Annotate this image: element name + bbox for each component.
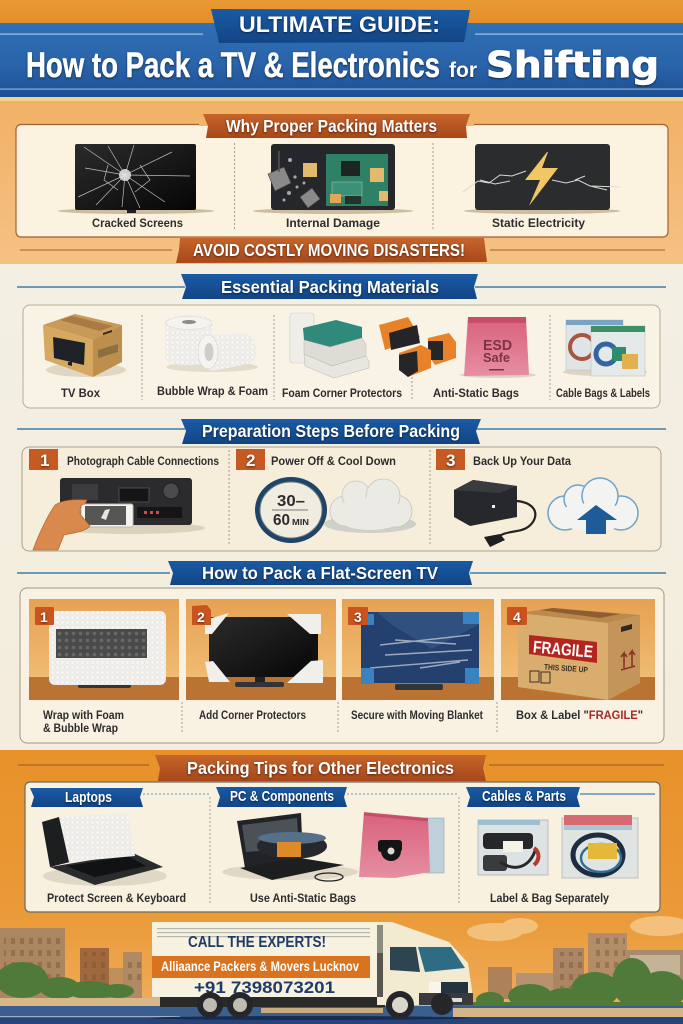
label: label and bag separately: Label & Bag Separately	[490, 891, 609, 905]
heading ribbon: packing tips: Packing Tips for Other Electronics	[187, 758, 454, 778]
label: static electricity: Static Electricity	[492, 216, 585, 230]
background: cream middle section	[0, 264, 683, 750]
truck wheels	[197, 991, 414, 1019]
icon: external hard drive	[454, 480, 535, 547]
section: how to pack a flat-screen TV	[17, 561, 666, 743]
panel: preparation steps	[22, 447, 661, 551]
icon: bubble wrap rolls	[165, 315, 258, 372]
heading ribbon: essential packing materials	[181, 274, 478, 299]
badge: step 1	[29, 449, 58, 470]
label: back up your data: Back Up Your Data	[473, 454, 571, 468]
icon: cable bags	[563, 320, 647, 376]
heading ribbon: preparation steps: Preparation Steps Before Packing	[202, 421, 460, 441]
badge: 4: 4	[513, 609, 521, 625]
section: preparation steps	[17, 419, 666, 551]
background: peach why-section	[0, 100, 683, 265]
step 4 tile: fragile box	[501, 599, 655, 700]
label: wrap with foam and bubble wrap	[43, 708, 124, 735]
background: top orange strip	[0, 0, 683, 30]
main title: for	[449, 59, 477, 82]
icon: pink ESD safe bag: ESD	[483, 337, 512, 354]
step 1 tile: wrap with foam	[29, 599, 179, 700]
panel: materials	[23, 305, 660, 408]
label: wrap with foam and bubble wrap: & Bubble Wrap	[43, 721, 118, 735]
heading ribbon: essential packing materials: Essential Packing Materials	[221, 277, 439, 297]
label: foam corner protectors: Foam Corner Protectors	[282, 386, 402, 400]
badge: step 2: 2	[246, 451, 255, 470]
sub-heading ribbon: PC and components: PC & Components	[230, 788, 334, 805]
step 2 tile: corner protectors	[186, 599, 336, 700]
label: power off and cool down: Power Off & Cool Down	[271, 454, 396, 468]
label: protect screen and keyboard: Protect Screen & Keyboard	[47, 891, 186, 905]
label: secure with moving blanket: Secure with Moving Blanket	[351, 708, 483, 722]
icon: foam sheets and roll	[290, 313, 369, 378]
icon: laptop and components	[222, 813, 358, 881]
truck cab	[377, 922, 473, 1015]
warning ribbon: avoid costly moving disasters: AVOID COSTLY MOVING DISASTERS!	[193, 240, 465, 260]
heading ribbon: flat-screen TV: How to Pack a Flat-Screen TV	[202, 563, 438, 583]
background: orange lower section	[0, 750, 683, 1024]
heading ribbon: flat-screen TV	[168, 561, 473, 585]
icon: 30-60 minute timer: 60	[273, 512, 290, 529]
badge: 1	[35, 607, 54, 625]
badge: step 2	[236, 449, 265, 470]
sub-heading ribbon: laptops	[30, 788, 143, 807]
callout: call the experts: CALL THE EXPERTS!	[188, 934, 326, 951]
subtitle tab: ULTIMATE GUIDE:	[239, 12, 440, 37]
icon: phone photographing device	[33, 478, 205, 550]
panel: TV packing steps	[20, 588, 664, 743]
icon: coiled cable bag	[562, 815, 638, 878]
badge: 3: 3	[354, 609, 362, 625]
sub-heading ribbon: cables and parts	[466, 787, 580, 807]
icon: cloud upload	[548, 478, 638, 534]
callout: company name band: Alliaance Packers & Movers Lucknov	[161, 959, 359, 974]
icon: orange corner protectors	[379, 317, 456, 377]
main title: Shifting	[486, 45, 659, 86]
sub-heading ribbon: PC and components	[216, 787, 347, 807]
main title: How to Pack a TV & Electronics	[26, 46, 440, 85]
moving truck with contact details	[150, 922, 473, 1020]
heading ribbon: why proper packing matters: Why Proper Packing Matters	[226, 116, 437, 136]
warning ribbon: avoid costly moving disasters	[20, 238, 665, 263]
label: cable bags and labels: Cable Bags & Labels	[556, 386, 650, 400]
icon: 30-60 minute timer	[255, 477, 327, 543]
section: packing tips for other electronics	[18, 755, 664, 912]
badge: step 3: 3	[446, 451, 455, 470]
header banner	[0, 9, 683, 101]
badge: step 3	[436, 449, 465, 470]
label: box and label fragile: Box & Label "FRAGILE"	[516, 708, 643, 722]
badge: 1: 1	[40, 609, 48, 625]
label: TV box: TV Box	[61, 386, 100, 400]
skyline and road scene	[0, 916, 683, 1024]
sub-heading ribbon: laptops: Laptops	[65, 789, 112, 806]
icon: laptop with bubble sheet	[42, 813, 167, 886]
badge: step 1: 1	[40, 451, 49, 470]
callout: phone number: +91 7398073201	[194, 979, 335, 997]
panel: why proper packing matters	[16, 114, 668, 237]
sub-heading ribbon: cables and parts: Cables & Parts	[482, 788, 566, 805]
label: cracked screens: Cracked Screens	[92, 216, 183, 230]
label: bubble wrap and foam: Bubble Wrap & Foam	[157, 384, 268, 398]
icon: pink ESD safe bag	[460, 317, 536, 378]
badge: 2: 2	[197, 609, 205, 625]
label: photograph cable connections: Photograph Cable Connections	[67, 454, 219, 468]
icon: 30-60 minute timer: 30–	[277, 493, 305, 510]
icon: TV box	[43, 314, 126, 377]
badge: 3	[348, 607, 368, 625]
label: use anti-static bags: Use Anti-Static Bags	[250, 891, 356, 905]
icon: anti-static pink bag	[359, 812, 444, 878]
icon: cable bag with label	[478, 820, 548, 875]
step 4 tile: fragile box: FRAGILE	[532, 637, 594, 662]
icon: internal damage circuit board	[253, 144, 413, 214]
label: internal damage: Internal Damage	[286, 216, 380, 230]
heading ribbon: packing tips	[155, 755, 486, 781]
label: anti-static bags: Anti-Static Bags	[433, 386, 519, 400]
label: add corner protectors: Add Corner Protectors	[199, 708, 306, 722]
callout: company name band	[152, 956, 370, 978]
panel: other electronics tips	[25, 782, 660, 912]
icon: cool cloud	[324, 479, 416, 533]
step 3 tile: moving blanket	[342, 599, 494, 700]
section: essential packing materials	[17, 274, 666, 408]
label: wrap with foam and bubble wrap: Wrap with Foam	[43, 708, 124, 722]
subtitle tab	[211, 9, 470, 43]
badge: 2	[192, 605, 211, 625]
step 4 tile: fragile box: THIS SIDE UP	[544, 662, 589, 675]
icon: 30-60 minute timer: MIN	[292, 518, 309, 527]
icon: cracked TV screen	[58, 144, 214, 214]
badge: 4	[507, 607, 527, 625]
icon: static electricity	[463, 144, 620, 214]
truck cargo box	[152, 922, 377, 997]
icon: pink ESD safe bag: Safe	[483, 351, 510, 365]
